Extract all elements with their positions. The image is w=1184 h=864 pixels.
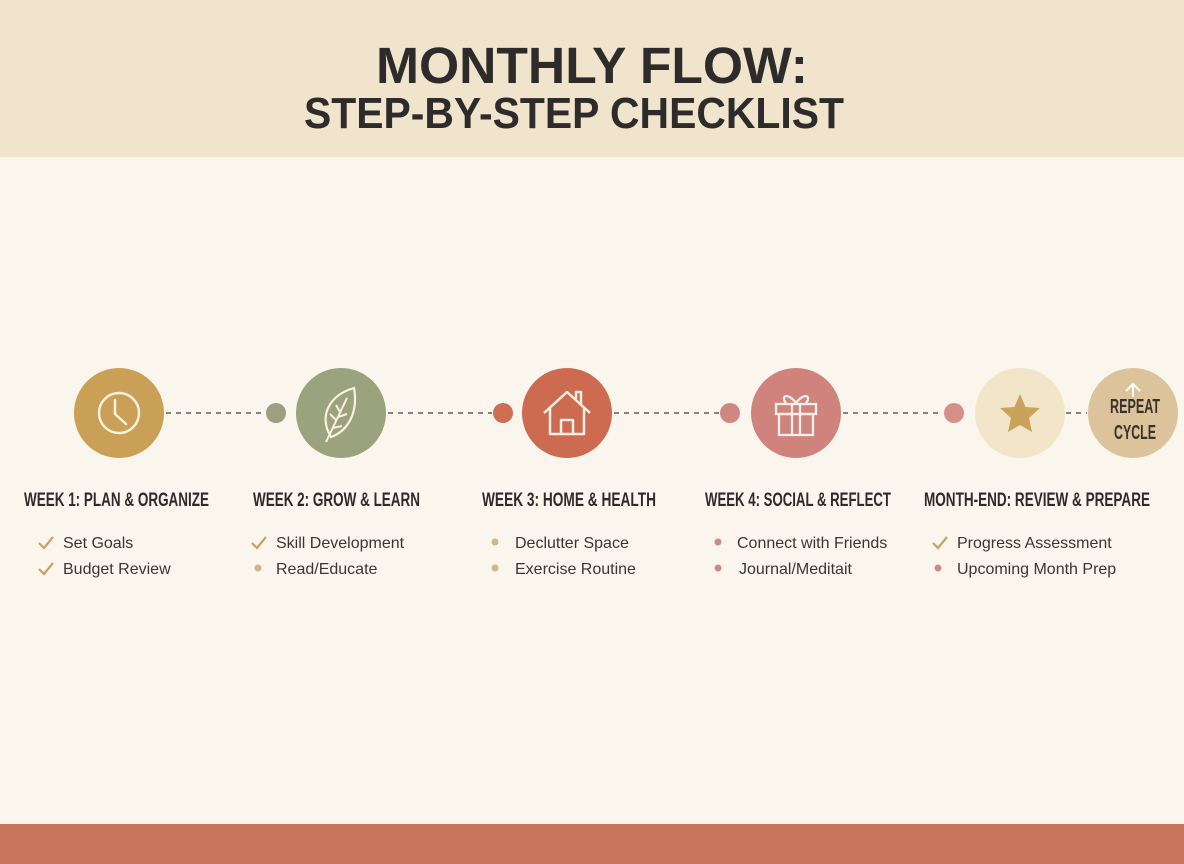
icon: leaf bbox=[296, 368, 386, 458]
step headings bbox=[24, 490, 1150, 511]
checklist items: Declutter Space bbox=[515, 535, 629, 552]
checklist items: Journal/Meditait bbox=[739, 561, 852, 578]
checklist items: Set Goals bbox=[63, 535, 133, 552]
footer bar bbox=[0, 824, 1184, 864]
icon: house bbox=[522, 368, 612, 458]
step headings: WEEK 3: HOME & HEALTH bbox=[482, 490, 656, 511]
checklist items: Skill Development bbox=[276, 535, 405, 552]
checklist items bbox=[39, 535, 1116, 578]
connector dots bbox=[266, 403, 964, 423]
checklist items: Exercise Routine bbox=[515, 561, 636, 578]
checklist items: Progress Assessment bbox=[957, 535, 1112, 552]
step headings: WEEK 1: PLAN & ORGANIZE bbox=[24, 490, 209, 511]
repeat cycle badge: CYCLE bbox=[1114, 422, 1156, 444]
timeline connector bbox=[166, 412, 1087, 414]
header band bbox=[0, 0, 1184, 157]
icon: clock bbox=[74, 368, 164, 458]
checklist items: Upcoming Month Prep bbox=[957, 561, 1116, 578]
step headings: WEEK 4: SOCIAL & REFLECT bbox=[705, 490, 891, 511]
title: MONTHLY FLOW: bbox=[376, 37, 808, 94]
repeat cycle badge bbox=[1088, 368, 1178, 458]
subtitle: STEP-BY-STEP CHECKLIST bbox=[304, 89, 844, 138]
checklist items: Read/Educate bbox=[276, 561, 378, 578]
step headings: WEEK 2: GROW & LEARN bbox=[253, 490, 420, 511]
icon: gift bbox=[751, 368, 841, 458]
checklist items: Connect with Friends bbox=[737, 535, 887, 552]
checklist items: Budget Review bbox=[63, 561, 171, 578]
icon: star bbox=[975, 368, 1065, 458]
